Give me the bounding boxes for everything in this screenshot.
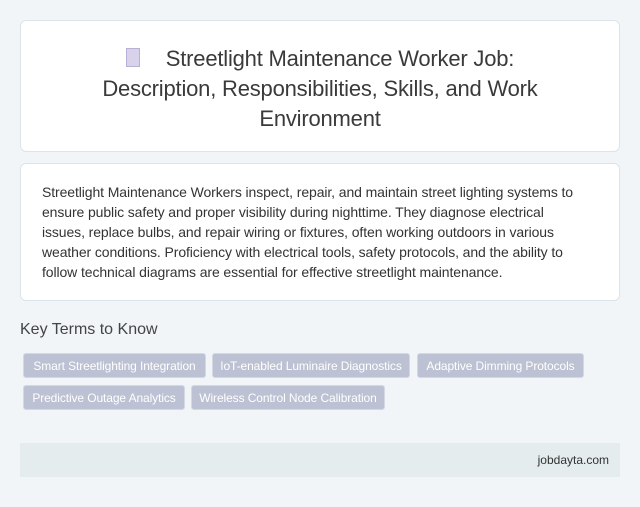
tag 1: Smart Streetlighting Integration: [33, 359, 196, 373]
description text: Streetlight Maintenance Workers inspect, repair, and maintain street lighting systems to: [42, 184, 573, 200]
tag 5: Wireless Control Node Calibration: [199, 391, 377, 405]
tag 5: [191, 385, 385, 410]
footer: [20, 443, 620, 477]
tag 1: [23, 353, 206, 378]
description text: weather conditions. Proficiency with electrical tools, safety protocols, and the ability to: [42, 244, 563, 260]
description text: [42, 184, 573, 280]
panel: title card: [20, 20, 620, 152]
title: Description, Responsibilities, Skills, and Work: [102, 76, 538, 101]
description text: issues, replace bulbs, and repair wiring or fixtures, often working outdoors in various: [42, 224, 554, 240]
tag 3: Adaptive Dimming Protocols: [426, 359, 575, 373]
title: [102, 46, 538, 131]
panel: description: [20, 163, 620, 301]
description text: ensure public safety and proper visibility during nighttime. They diagnose electrical: [42, 204, 544, 220]
title: Streetlight Maintenance Worker Job:: [166, 46, 514, 71]
tag 4: [23, 385, 185, 410]
tag 2: IoT-enabled Luminaire Diagnostics: [220, 359, 402, 373]
title: Environment: [259, 106, 381, 131]
tag 4: Predictive Outage Analytics: [32, 391, 176, 405]
tag 2: [212, 353, 410, 378]
tag 3: [417, 353, 584, 378]
description text: follow technical diagrams are essential for effective streetlight maintenance.: [42, 264, 502, 280]
footer text: jobdayta.com: [538, 453, 609, 467]
heading: key terms: Key Terms to Know: [20, 321, 158, 338]
